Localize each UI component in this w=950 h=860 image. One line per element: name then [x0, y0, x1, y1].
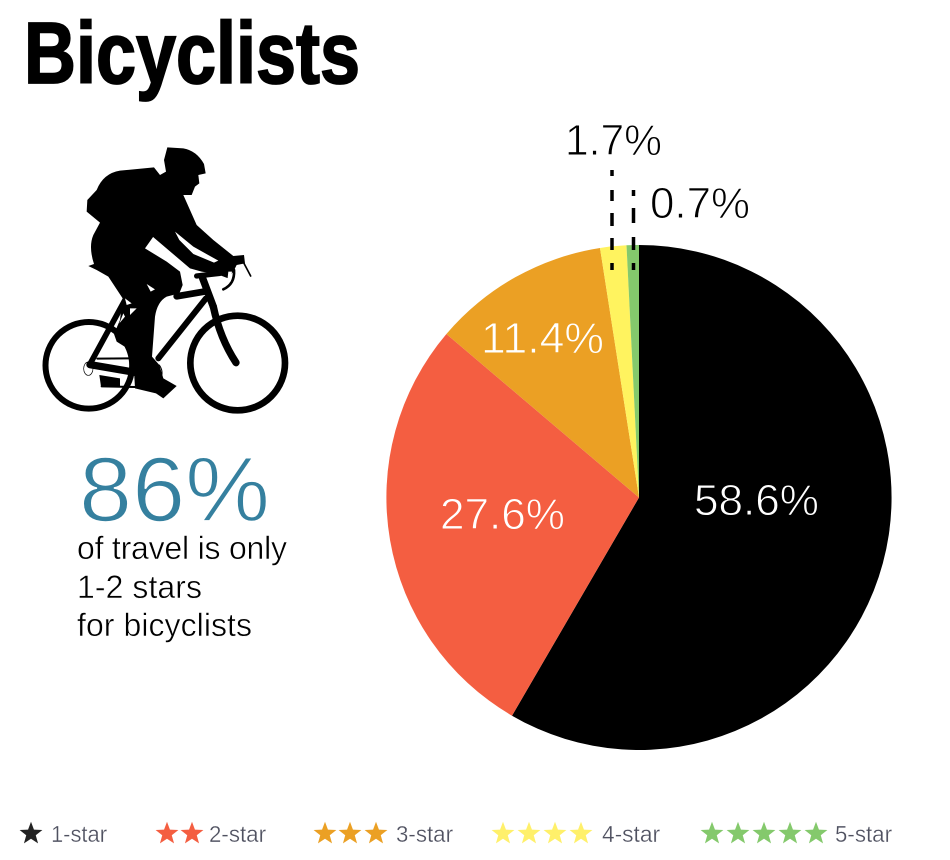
front wheel	[190, 316, 285, 410]
text block: travel description: 1-2 stars	[77, 569, 202, 605]
icon: cyclist silhouette	[45, 147, 285, 410]
legend	[20, 821, 892, 847]
legend: 5-star	[701, 821, 892, 847]
legend: 2-star: 2-star	[209, 821, 266, 847]
slice: 4-star 1.7%	[600, 245, 639, 498]
bike frame	[84, 263, 251, 387]
legend: 5-star: 5-star	[835, 821, 892, 847]
callout: 1.7%: 1.7%	[565, 116, 662, 165]
legend: 3-star: 3-star	[396, 821, 453, 847]
callout: 0.7%	[634, 179, 750, 270]
legend: 1-star: 1-star	[51, 821, 107, 847]
gap inside arm	[175, 232, 218, 263]
slice: 2-star 27.6%	[386, 334, 639, 716]
legend: 4-star: 4-star	[602, 821, 660, 847]
callout: 0.7%: 0.7%	[650, 179, 750, 228]
title: Bicyclists	[24, 5, 360, 102]
pie chart	[386, 245, 892, 750]
slice: 3-star 11.4%	[446, 248, 639, 498]
legend: 3-star	[314, 821, 453, 847]
rider arm and hand	[153, 195, 245, 278]
text block: travel description: of travel is only	[77, 530, 287, 566]
label: 11.4%: 11.4%	[481, 314, 604, 363]
legend: 4-star	[492, 821, 660, 847]
rear wheel	[45, 322, 132, 409]
legend: 1-star	[20, 821, 107, 847]
slice: 1-star 58.6%	[512, 245, 892, 750]
rider torso and leg	[87, 147, 206, 398]
label: 27.6%: 27.6%	[440, 490, 565, 539]
text block: travel description	[77, 530, 287, 643]
text block: travel description: for bicyclists	[77, 607, 252, 643]
slice: 5-star 0.7%	[626, 245, 639, 498]
label: 58.6%: 58.6%	[694, 476, 819, 525]
legend: 2-star	[156, 821, 266, 847]
pedal crank block	[99, 375, 120, 387]
statistic: 86%: 86%	[79, 439, 270, 541]
gaps around the seat tube	[147, 284, 155, 292]
